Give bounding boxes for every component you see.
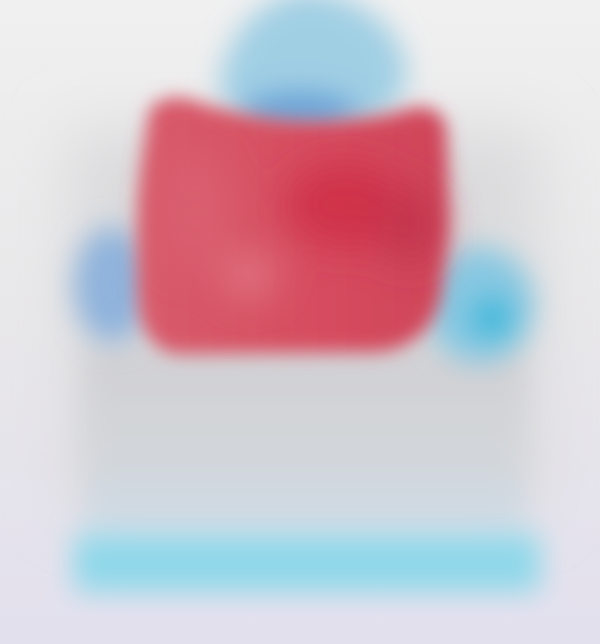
soft grey shading behind the illustration bbox=[70, 130, 540, 510]
cyan bottom bar bbox=[74, 534, 540, 592]
blue shape at top bbox=[220, 0, 406, 134]
left blue blob bbox=[74, 227, 150, 343]
red shape tonal detail bbox=[160, 150, 440, 295]
lower text panel bbox=[85, 345, 525, 530]
red central shape bbox=[137, 98, 448, 354]
right blue blob bbox=[426, 247, 534, 363]
